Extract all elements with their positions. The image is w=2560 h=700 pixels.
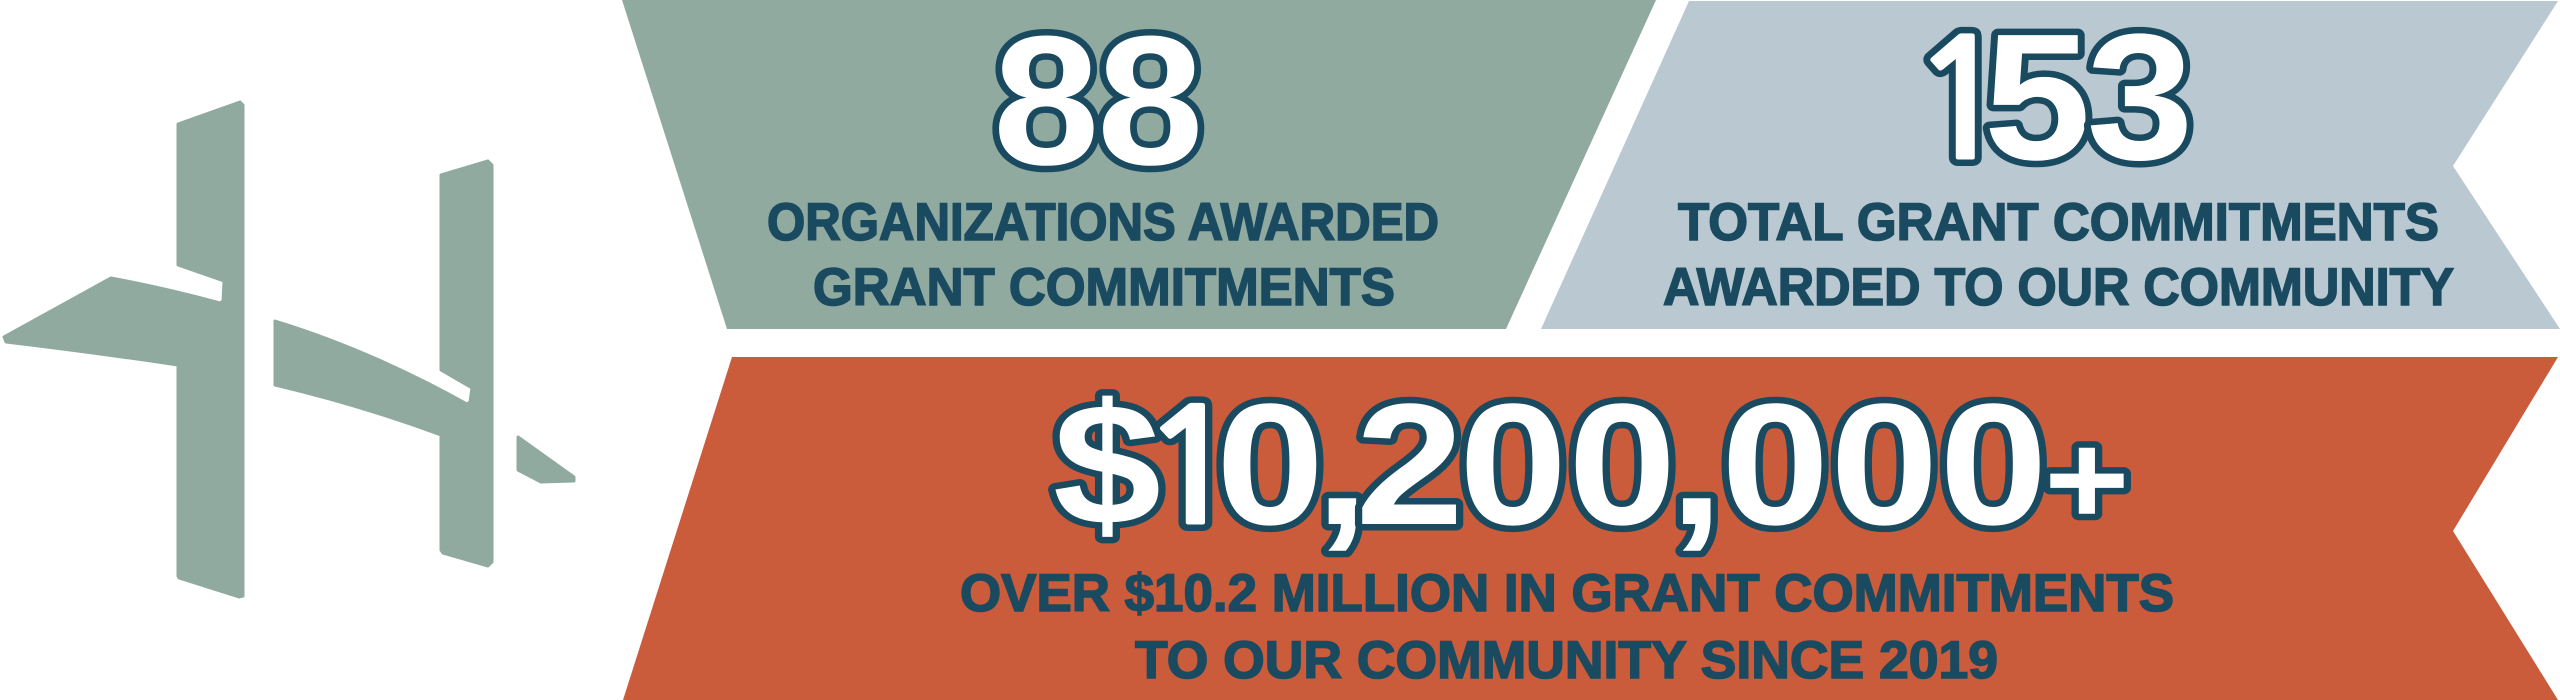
stat number: $10,200,000+: 2	[1356, 368, 1464, 562]
stat number: 153: 1	[1907, 19, 2015, 184]
label: organizations awarded grant commitments: ORGANIZATIONS AWARDED	[767, 193, 1439, 252]
panel: total grant commitments	[1541, 0, 2560, 329]
panel shape: green banner	[622, 0, 1656, 329]
label: organizations awarded grant commitments: GRANT COMMITMENTS	[813, 258, 1395, 317]
label: organizations awarded grant commitments	[767, 193, 1439, 317]
label: over $10.2 million in grant commitments to our community since 2019	[960, 564, 2174, 690]
panel: total dollars	[623, 357, 2558, 700]
icon: H logo mark	[4, 102, 574, 597]
stat number: $10,200,000+: +	[2044, 407, 2130, 552]
stat number: $10,200,000+: 0	[1721, 368, 1829, 562]
stat number: 153: 5	[1984, 0, 2091, 198]
label: over $10.2 million in grant commitments to our community since 2019: OVER $10.2 MILLION IN GRANT COMMITMENTS	[960, 564, 2174, 623]
stat number: $10,200,000+: 0	[1939, 368, 2048, 562]
stat number: $10,200,000+: 0	[1830, 368, 1938, 562]
panel shape: blue banner	[1541, 1, 2560, 329]
stat number: $10,200,000+: ,	[1315, 368, 1369, 562]
label: over $10.2 million in grant commitments to our community since 2019: TO OUR COMMUNITY SINCE 2019	[1135, 631, 1998, 690]
label: total grant commitments awarded to our community: AWARDED TO OUR COMMUNITY	[1663, 258, 2454, 317]
stat number: 88: 88	[993, 0, 1203, 203]
panel: organizations awarded	[622, 0, 1656, 329]
label: total grant commitments awarded to our community: TOTAL GRANT COMMITMENTS	[1678, 193, 2439, 252]
label: total grant commitments awarded to our community	[1663, 193, 2454, 317]
stat number: $10,200,000+: $	[1053, 368, 1161, 562]
panel shape: orange banner	[623, 357, 2558, 700]
stat number: $10,200,000+: ,	[1669, 368, 1724, 562]
stat number: $10,200,000+: 0	[1459, 368, 1567, 562]
stat number: 153: 3	[2086, 0, 2194, 198]
stat number: $10,200,000+: 1	[1137, 391, 1246, 548]
stat number: $10,200,000+: 0	[1568, 368, 1676, 562]
stat number: $10,200,000+: 0	[1216, 368, 1324, 562]
